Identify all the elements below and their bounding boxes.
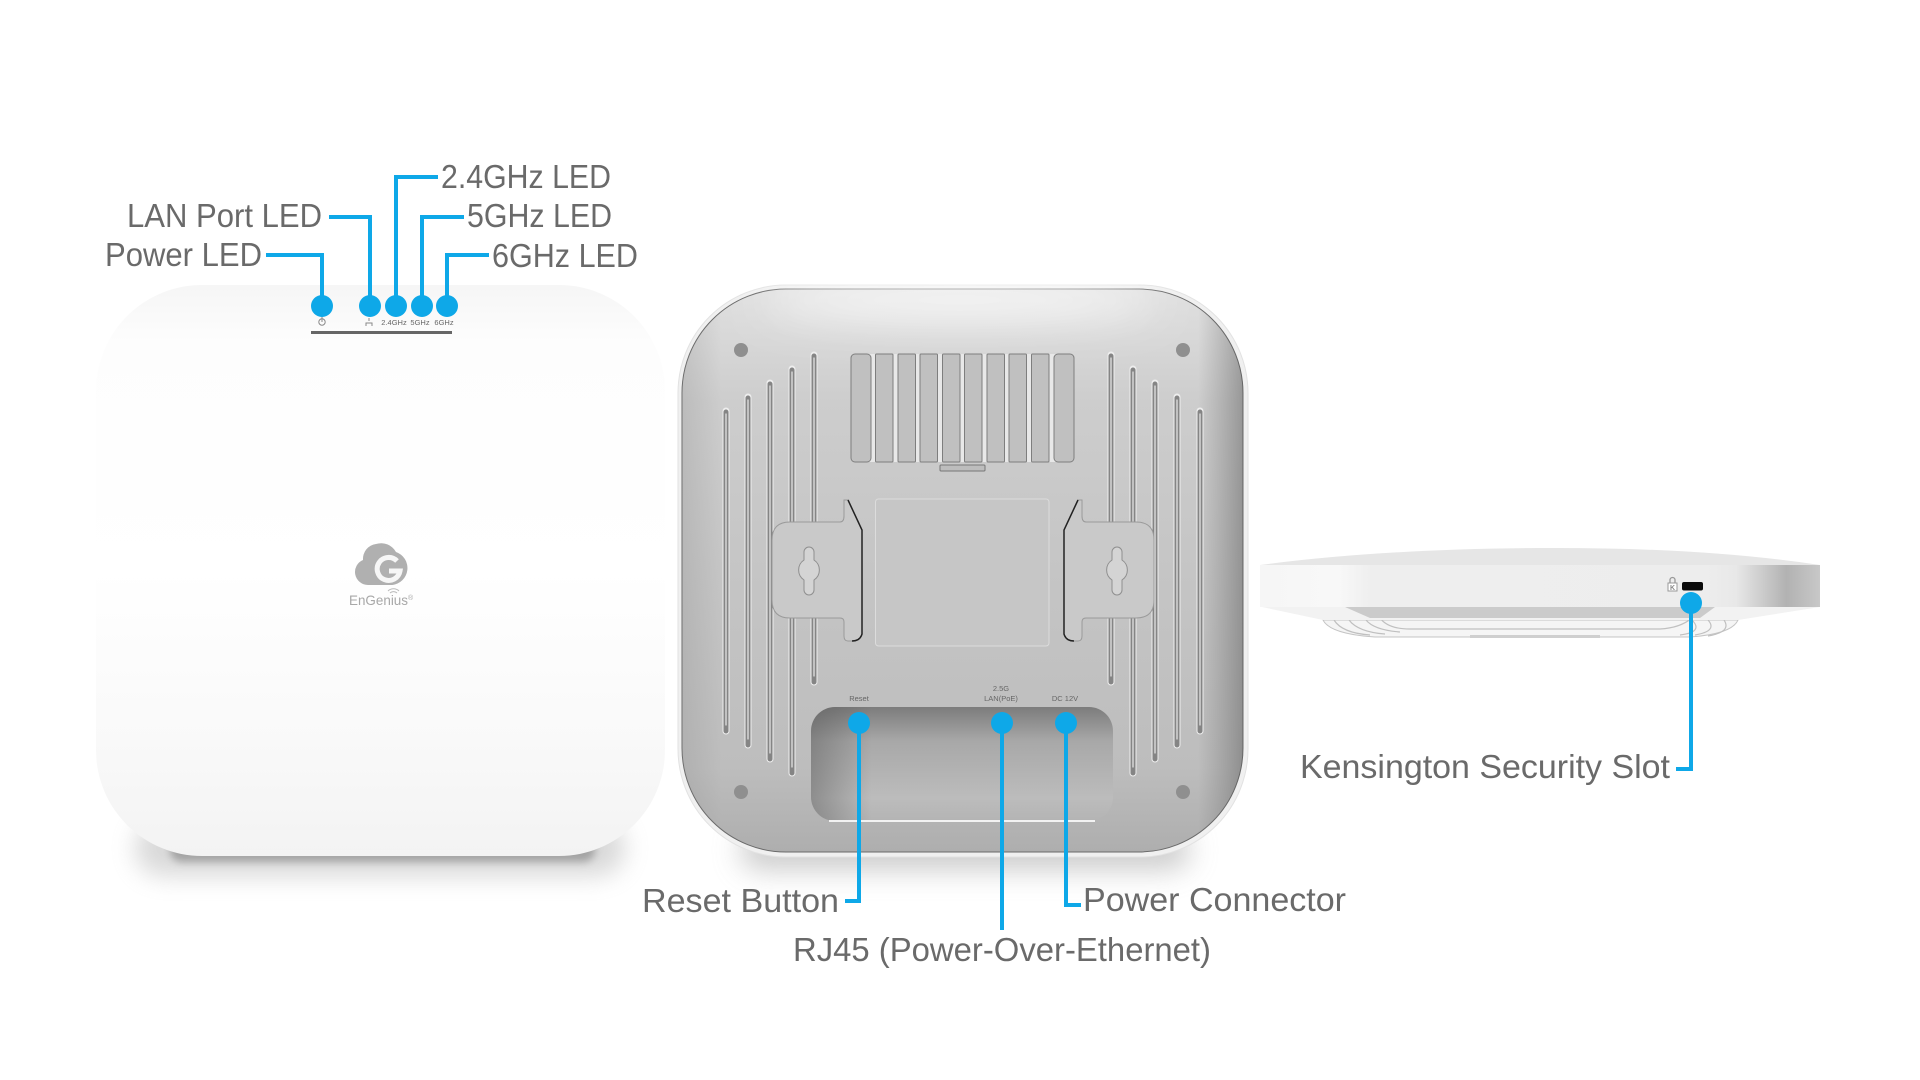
callout: Reset Button	[642, 712, 870, 919]
port labels	[849, 684, 1078, 703]
lower taper	[1262, 607, 1820, 620]
shaded band	[1345, 607, 1715, 618]
callout: Power LED	[105, 236, 333, 317]
LED bar	[311, 331, 452, 334]
callout: RJ45 Power-Over-Ethernet	[793, 712, 1211, 968]
metal back plate	[682, 282, 1243, 852]
port labels: Reset	[849, 694, 870, 703]
port labels: 2.5G	[993, 684, 1009, 693]
device shadow	[740, 830, 1190, 870]
vent grille	[851, 354, 1074, 462]
callout: Kensington Security Slot	[1300, 592, 1702, 785]
mounting bracket right	[1064, 500, 1154, 641]
callout: 2.4GHz LED	[385, 158, 611, 317]
cooling fins right	[1111, 355, 1200, 773]
vent latch	[940, 465, 985, 471]
callout: 2.4GHz LED: 2.4GHz LED	[441, 158, 611, 195]
panel: side view of access point	[1260, 548, 1820, 638]
underside antenna housing	[1323, 618, 1738, 638]
cooling fins left	[726, 355, 814, 773]
Kensington lock icon: K	[1670, 585, 1675, 592]
side band	[1260, 565, 1820, 607]
device front body	[96, 285, 665, 856]
port recess	[811, 707, 1113, 821]
mounting bracket left	[772, 500, 862, 641]
panel: rear view of access point	[678, 282, 1248, 870]
callout: 6GHz LED	[436, 237, 638, 317]
callout: 5GHz LED: 5GHz LED	[467, 197, 612, 234]
logo: EnGenius: EnGenius	[349, 592, 408, 608]
screw holes	[734, 343, 1190, 799]
port labels: LAN(PoE)	[984, 694, 1018, 703]
logo: EnGenius	[349, 543, 414, 608]
device shadow	[135, 820, 625, 876]
callout: Power LED: Power LED	[105, 236, 262, 273]
LED icon labels: 6GHz	[434, 318, 454, 327]
callout: Kensington Security Slot: Kensington Security Slot	[1300, 748, 1670, 785]
LED icon labels: 2.4GHz	[381, 318, 407, 327]
LED icon labels	[319, 317, 454, 327]
callout: LAN Port LED	[127, 197, 381, 317]
logo: EnGenius: ®	[408, 594, 414, 602]
dome top	[1260, 548, 1820, 565]
security slot	[1682, 582, 1703, 590]
label plate	[876, 499, 1049, 646]
port labels: DC 12V	[1052, 694, 1078, 703]
Kensington lock icon	[1668, 578, 1677, 592]
callout: 5GHz LED	[411, 197, 612, 317]
panel: front view of access point	[96, 285, 665, 876]
callout: RJ45 Power-Over-Ethernet: RJ45 (Power-Over-Ethernet)	[793, 931, 1211, 968]
callout: Power Connector: Power Connector	[1083, 881, 1346, 918]
callout: LAN Port LED: LAN Port LED	[127, 197, 322, 234]
callout: 6GHz LED: 6GHz LED	[492, 237, 638, 274]
callout: Power Connector	[1055, 712, 1346, 918]
callout: Reset Button: Reset Button	[642, 882, 839, 919]
outer white shell	[678, 285, 1248, 857]
LED icon labels: 5GHz	[410, 318, 430, 327]
